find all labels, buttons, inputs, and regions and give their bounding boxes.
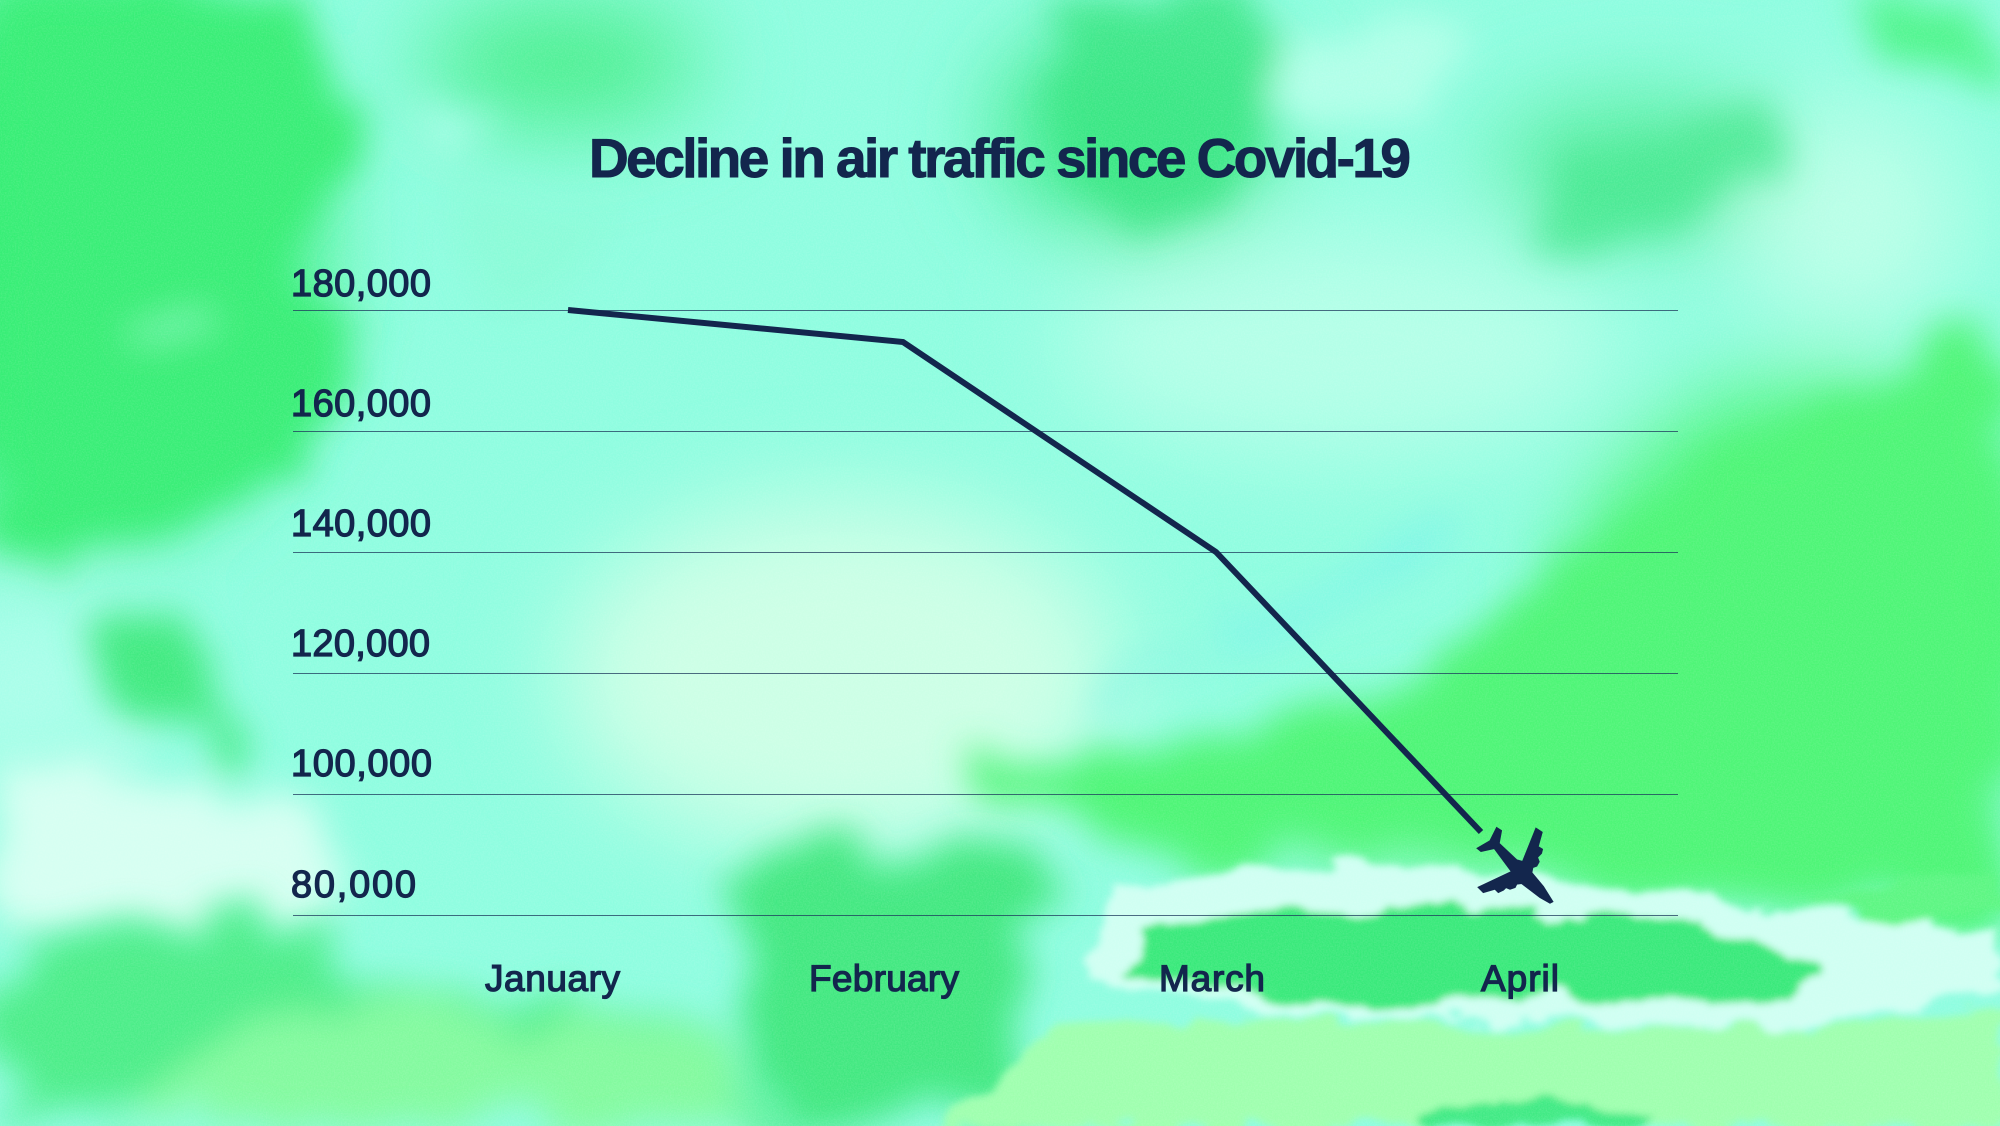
x-axis month labels: February [809,958,960,999]
x-axis month labels [485,958,1559,999]
title: Decline in air traffic since Covid-19 [589,127,1411,189]
y-axis labels: 100,000 [291,743,432,785]
x-axis month labels: January [485,958,620,999]
horizontal grid lines [293,310,1678,916]
icon: descending airplane [1477,828,1553,903]
y-axis labels: 140,000 [291,503,431,545]
y-axis labels: 120,000 [291,623,430,665]
y-axis labels: 160,000 [291,383,431,425]
x-axis month labels: April [1481,958,1559,999]
y-axis labels: 180,000 [291,263,431,305]
y-axis labels [291,263,432,906]
data line: falling traffic [568,310,1481,832]
x-axis month labels: March [1159,958,1265,999]
y-axis labels: 80,000 [291,864,416,906]
